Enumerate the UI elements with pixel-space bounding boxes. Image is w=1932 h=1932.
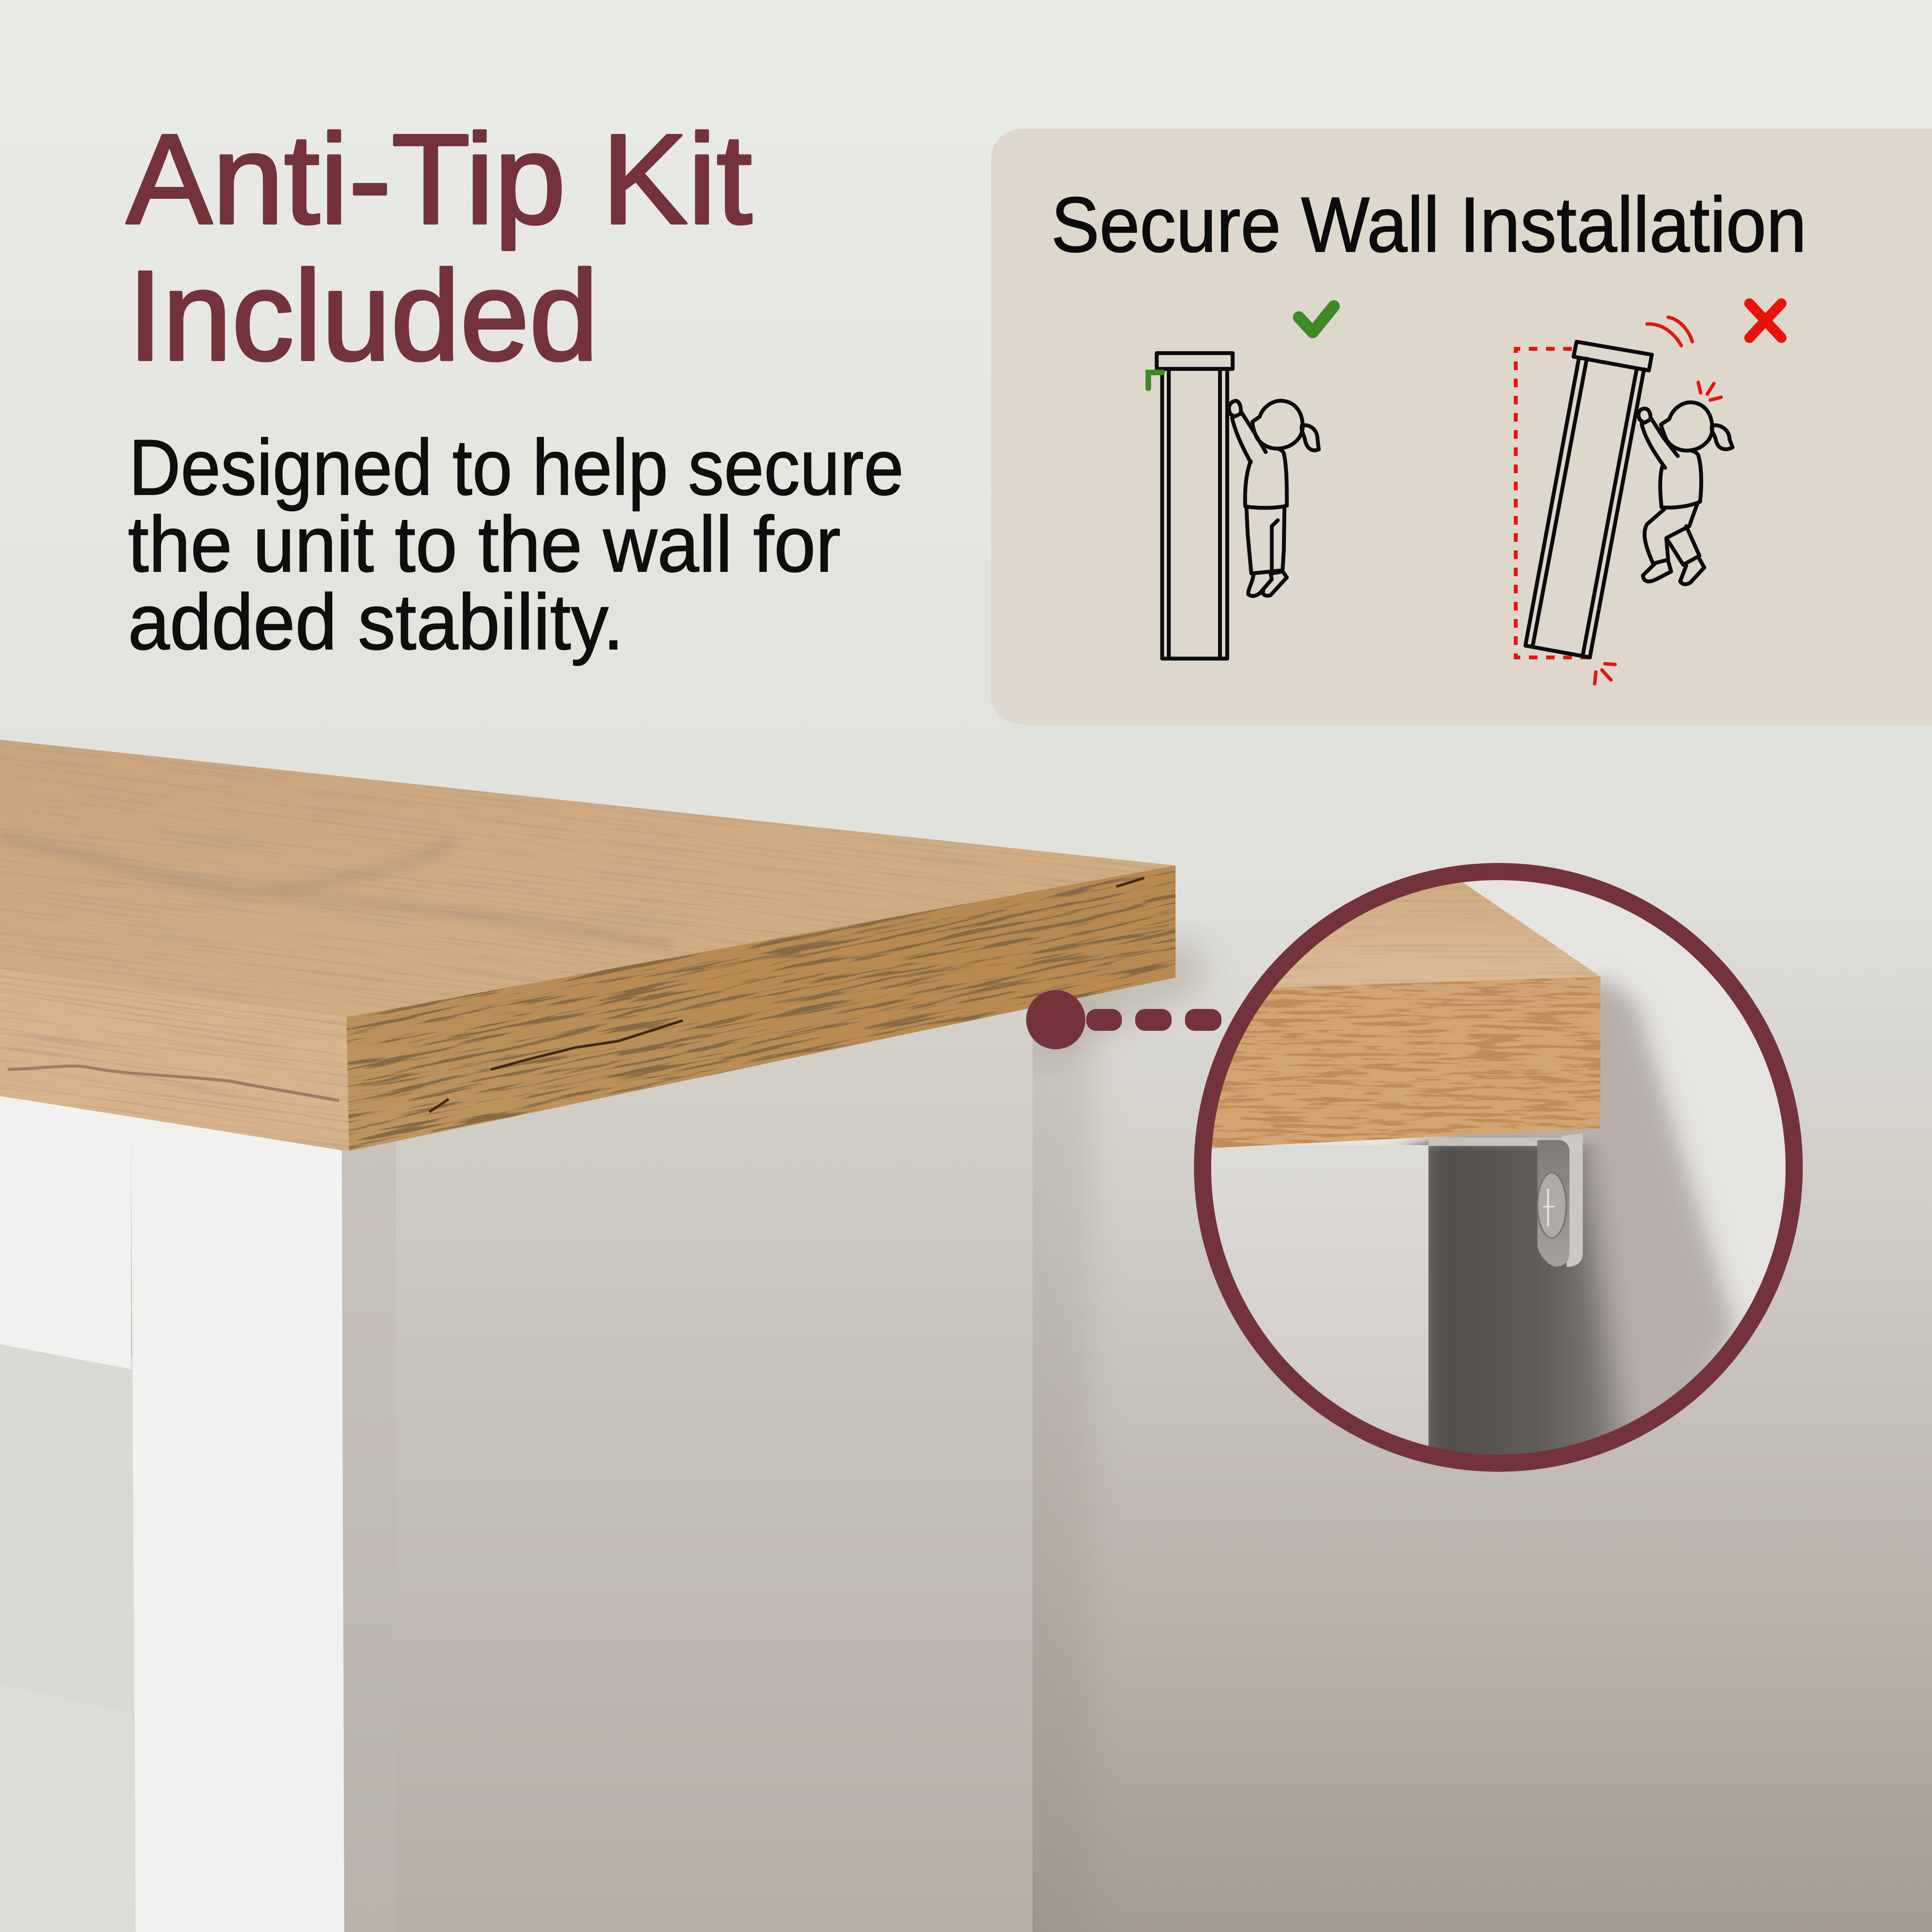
headline: [126, 108, 753, 387]
description text: Designed to help secure: [129, 423, 904, 511]
dark gap behind unit: [1415, 1143, 1628, 1486]
headline: Anti-Tip Kit: [126, 108, 753, 251]
lens wood front face: [1191, 962, 1617, 1162]
lens wood top surface: [1191, 862, 1617, 1054]
cross mark: [1750, 304, 1781, 338]
motion arcs: [1647, 317, 1692, 346]
shadow under tabletop on wall: [1428, 975, 1735, 1486]
cabinet anchored upright: [1157, 353, 1233, 659]
correct installation illustration: [1148, 306, 1334, 659]
lens white side panel: [1191, 1145, 1428, 1474]
shadow on wall beside unit: [987, 936, 1206, 1932]
headline: Included: [128, 244, 598, 387]
green wall bracket: [1148, 373, 1162, 388]
panel: secure wall installation: [991, 129, 1932, 725]
impact marks: [1595, 382, 1721, 684]
child figure pulling cabinet: [1639, 402, 1733, 584]
shelf floor: [0, 1684, 137, 1932]
description text: added stability.: [128, 577, 624, 666]
panel heading: Secure Wall Installation: [1051, 181, 1807, 268]
anti-tip metal bracket: [1428, 1133, 1583, 1267]
red dashed original position: [1516, 349, 1590, 657]
tabletop left face: [0, 888, 445, 1236]
tabletop front face: [188, 714, 1317, 1307]
callout connector: dot and dashes: [1026, 990, 1221, 1049]
side panel: [342, 1007, 1033, 1932]
tipped cabinet: [1525, 342, 1652, 657]
incorrect tipping illustration: [1516, 304, 1781, 684]
front leg: [131, 1116, 344, 1932]
tabletop top surface: [0, 562, 1352, 1209]
magnified detail circle: [1191, 862, 1810, 1486]
lens contents: [1191, 862, 1810, 1486]
check mark: [1299, 306, 1334, 332]
child figure holding cabinet: [1229, 401, 1319, 596]
description text: the unit to the wall for: [128, 500, 841, 588]
lens ring: [1203, 872, 1794, 1463]
tabletop: [0, 562, 1352, 1307]
top apron: [0, 1091, 131, 1369]
side panel strip: [342, 1140, 396, 1932]
furniture: white frame and side panel: [0, 1007, 1033, 1932]
inner recess: [0, 1331, 137, 1932]
description text: [128, 423, 904, 666]
